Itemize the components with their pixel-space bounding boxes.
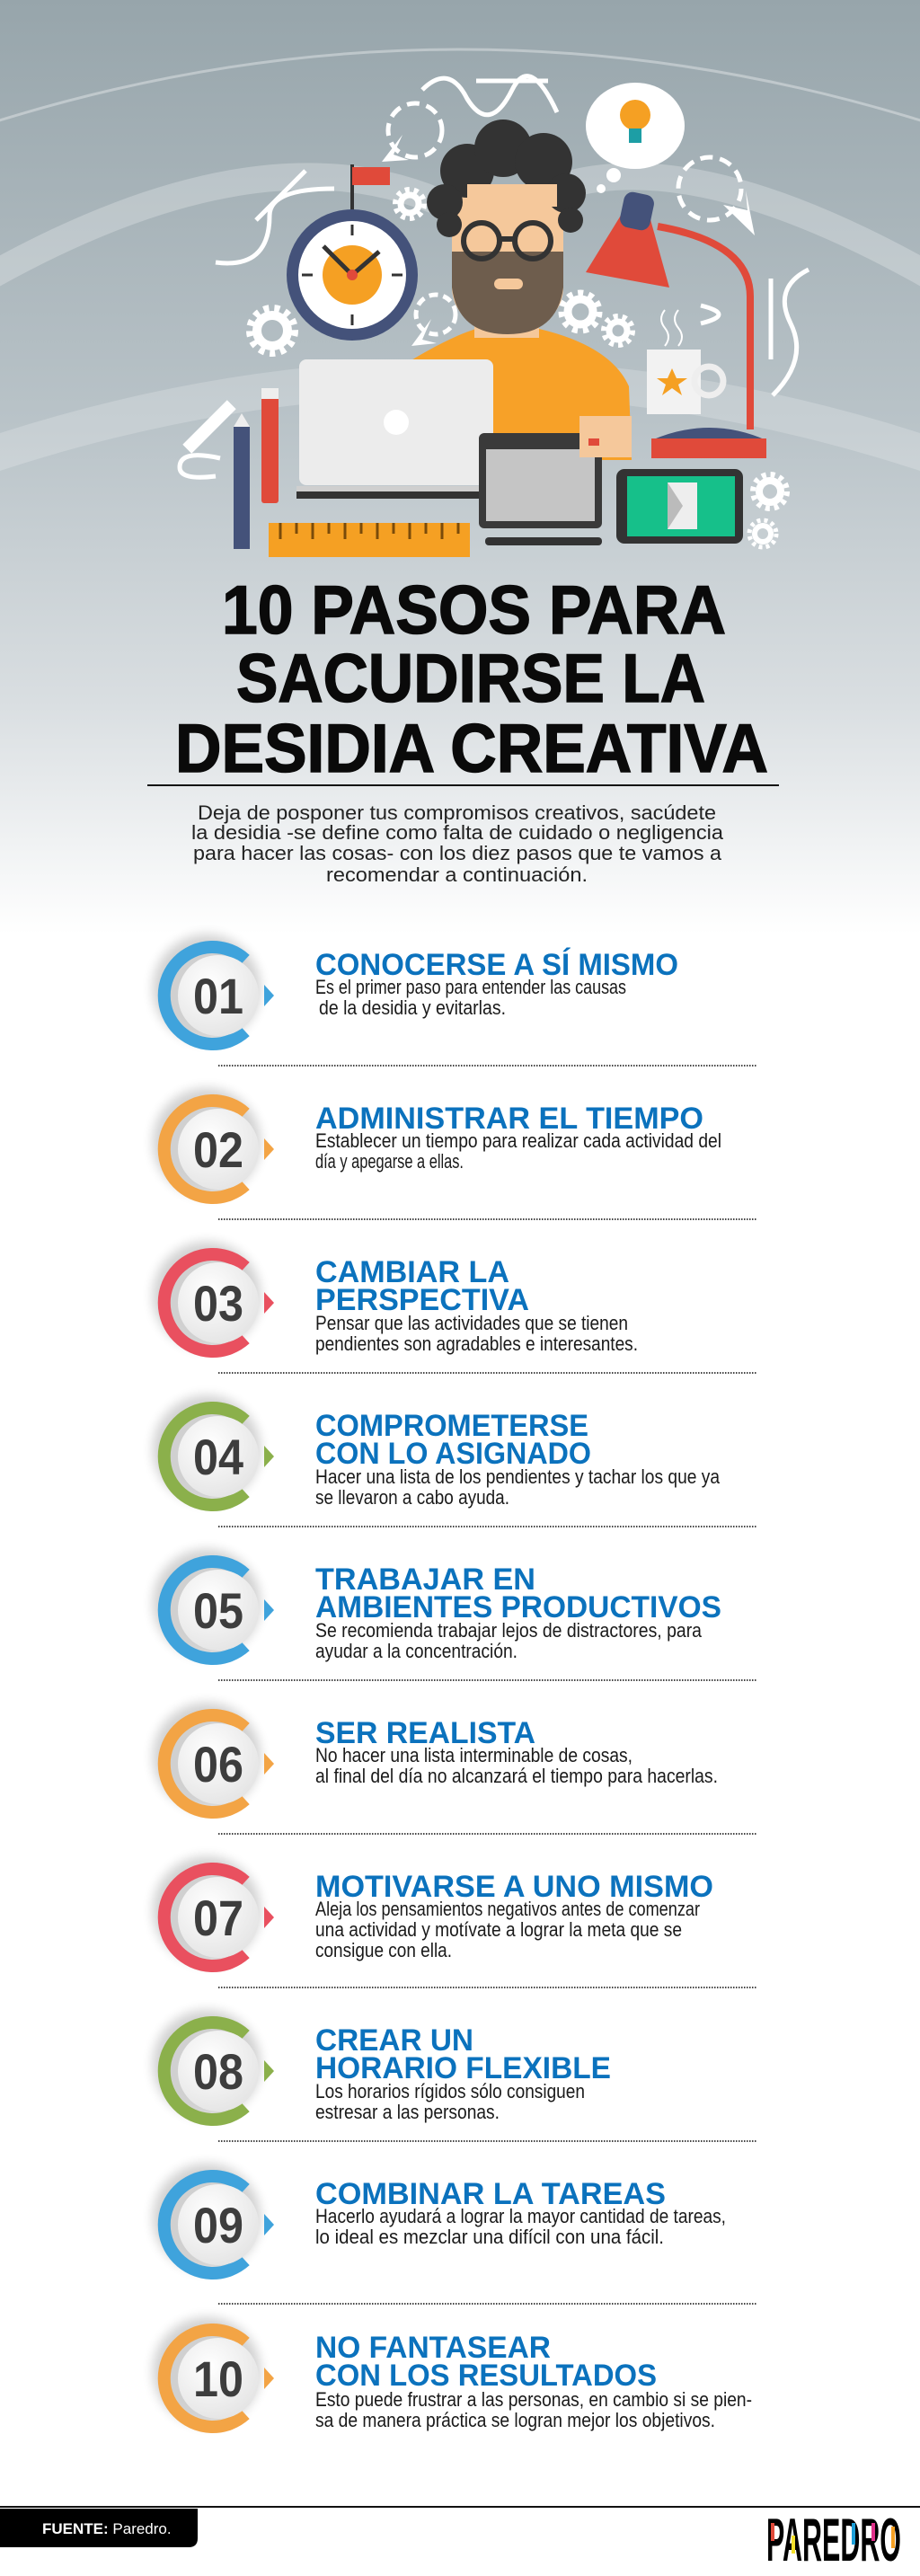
step 01 [153, 934, 757, 1066]
badge 03 [153, 1242, 274, 1351]
step 05 [153, 1549, 757, 1680]
step text 07: Aleja los pensamientos negativos antes de comenzar [315, 1898, 700, 1920]
badge 08: 08 [193, 2043, 243, 2100]
step 06 [153, 1703, 757, 1834]
badge 04: 04 [193, 1429, 243, 1485]
step text 07: MOTIVARSE A UNO MISMO [315, 1870, 713, 1904]
icon: thought bubble with lightbulb [586, 83, 685, 193]
step text 10: sa de manera práctica se logran mejor los objetivos. [315, 2409, 715, 2431]
badge 03: 03 [193, 1275, 243, 1332]
step text 08: CREAR UN [315, 2023, 473, 2058]
badge 06: 06 [193, 1736, 243, 1793]
step 07 [153, 1856, 757, 1987]
step 10 [153, 2317, 752, 2431]
step text 01 [315, 948, 678, 1019]
step text 05 [315, 1562, 721, 1662]
step text 05: Se recomienda trabajar lejos de distractores, para [315, 1619, 703, 1642]
step 09 [153, 2164, 757, 2304]
intro text: la desidia -se define como falta de cuidado o negligencia [191, 821, 724, 844]
badge 05 [153, 1549, 274, 1659]
icon: ruler [269, 523, 470, 557]
icon: stylus [485, 537, 602, 545]
icon: tablet and hand [479, 416, 632, 528]
step text 03: PERSPECTIVA [315, 1283, 529, 1317]
step text 05: TRABAJAR EN [315, 1562, 535, 1597]
step text 04: se llevaron a cabo ayuda. [315, 1486, 509, 1509]
footer source box: FUENTE: Paredro. [42, 2520, 172, 2537]
step text 05: ayudar a la concentración. [315, 1640, 518, 1662]
badge 05: 05 [193, 1582, 243, 1639]
step text 01: Es el primer paso para entender las causas [315, 976, 626, 998]
badge 01 [153, 934, 274, 1044]
step text 03: pendientes son agradables e interesantes. [315, 1332, 638, 1355]
step text 01: CONOCERSE A SÍ MISMO [315, 948, 678, 982]
step text 10: NO FANTASEAR [315, 2331, 551, 2365]
step text 05: AMBIENTES PRODUCTIVOS [315, 1590, 721, 1624]
title: 10 PASOS PARA [222, 572, 726, 649]
step text 09: Hacerlo ayudará a lograr la mayor cantidad de tareas, [315, 2205, 726, 2227]
step text 07 [315, 1870, 713, 1961]
step text 04 [315, 1409, 721, 1509]
intro text: Deja de posponer tus compromisos creativos, sacúdete [198, 801, 716, 824]
step text 06: SER REALISTA [315, 1716, 535, 1750]
step text 08: HORARIO FLEXIBLE [315, 2051, 611, 2085]
badge 08 [153, 2010, 274, 2120]
icon: laptop [296, 359, 496, 499]
step text 08: Los horarios rígidos sólo consiguen [315, 2080, 585, 2102]
badge 01: 01 [193, 968, 243, 1024]
step text 02 [315, 1102, 721, 1173]
intro text [191, 801, 724, 886]
intro text: para hacer las cosas- con los diez pasos que te vamos a [193, 842, 722, 864]
step 04 [153, 1395, 757, 1527]
step text 09: COMBINAR LA TAREAS [315, 2177, 666, 2211]
icon: mug [647, 310, 723, 414]
step text 08: estresar a las personas. [315, 2101, 500, 2123]
intro text: recomendar a continuación. [326, 863, 588, 886]
badge 07: 07 [193, 1890, 243, 1946]
badge 02: 02 [193, 1121, 243, 1178]
step text 02: Establecer un tiempo para realizar cada actividad del [315, 1129, 721, 1152]
icon: curves and bezier tools [180, 76, 809, 477]
badge 10: 10 [193, 2350, 243, 2407]
step text 07: una actividad y motívate a lograr la meta que se [315, 1918, 682, 1941]
title [175, 572, 768, 787]
step 08 [153, 2010, 757, 2141]
step text 03: Pensar que las actividades que se tienen [315, 1312, 628, 1334]
step text 09: lo ideal es mezclar una difícil con una fácil. [315, 2226, 664, 2248]
title: SACUDIRSE LA [236, 641, 705, 717]
badge 06 [153, 1703, 274, 1812]
icon: phone [616, 469, 743, 544]
step text 04: Hacer una lista de los pendientes y tachar los que ya [315, 1465, 721, 1488]
step 02 [153, 1088, 757, 1219]
step text 09 [315, 2177, 726, 2248]
step text 06 [315, 1716, 718, 1787]
step text 03: CAMBIAR LA [315, 1255, 509, 1289]
step text 10 [315, 2331, 752, 2431]
icon: lamp [586, 190, 766, 458]
badge 09 [153, 2164, 274, 2273]
step text 02: día y apegarse a ellas. [315, 1150, 464, 1173]
icon: man [405, 120, 632, 460]
step text 03 [315, 1255, 638, 1355]
step text 04: CON LO ASIGNADO [315, 1437, 591, 1471]
badge 10 [153, 2317, 274, 2427]
step text 01: de la desidia y evitarlas. [319, 996, 506, 1019]
step 03 [153, 1242, 757, 1373]
step text 04: COMPROMETERSE [315, 1409, 588, 1443]
step text 07: consigue con ella. [315, 1939, 452, 1961]
step text 10: Esto puede frustrar a las personas, en cambio si se pien- [315, 2388, 752, 2411]
badge 04 [153, 1395, 274, 1505]
icon: clock with flag [287, 164, 418, 341]
step text 02: ADMINISTRAR EL TIEMPO [315, 1102, 703, 1136]
step text 08 [315, 2023, 611, 2123]
title: DESIDIA CREATIVA [175, 711, 768, 787]
step text 10: CON LOS RESULTADOS [315, 2359, 657, 2393]
icon: gears [250, 190, 787, 547]
footer source box [0, 2509, 198, 2547]
icon: pens [182, 388, 279, 549]
background header gradient [0, 0, 920, 934]
badge 02 [153, 1088, 274, 1198]
step text 06: al final del día no alcanzará el tiempo para hacerlas. [315, 1765, 718, 1787]
badge 07 [153, 1856, 274, 1966]
illustration: designer at desk [180, 76, 809, 557]
step text 06: No hacer una lista interminable de cosas, [315, 1744, 632, 1766]
badge 09: 09 [193, 2197, 243, 2253]
